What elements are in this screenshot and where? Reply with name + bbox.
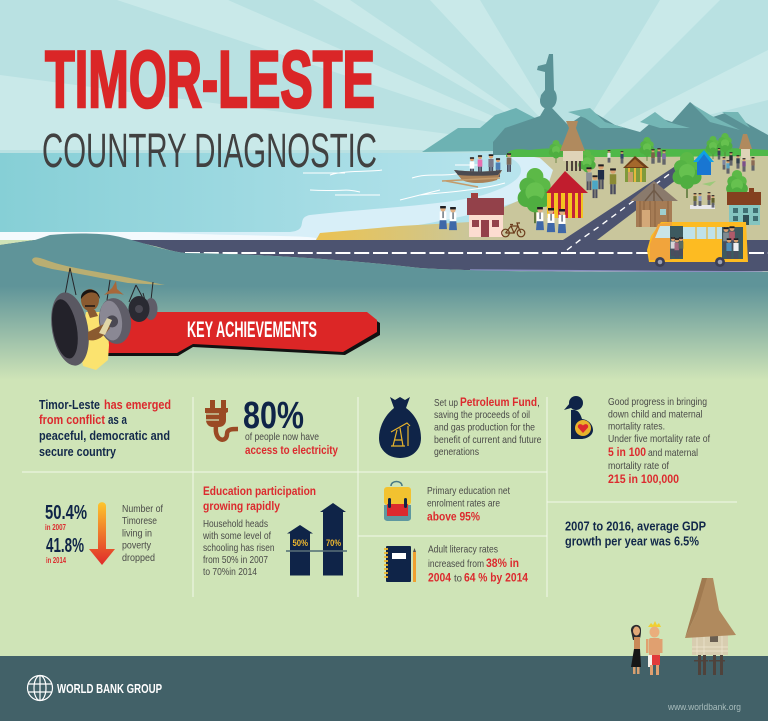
scene: far hut	[739, 134, 752, 160]
text: child and maternal mortality: mortality rates.	[608, 420, 665, 432]
scene: large wooden hut	[630, 181, 678, 227]
stat: 80 percent electricity: 80%	[243, 395, 304, 437]
scene: students	[439, 206, 566, 233]
arrow: poverty dropped	[89, 502, 115, 565]
beach foam	[0, 155, 553, 240]
text: adult literacy: 64 % by 2014	[464, 572, 529, 584]
sea	[0, 153, 560, 235]
hedge row	[506, 148, 768, 157]
text: GDP growth	[565, 520, 706, 548]
logo: World Bank Group: WORLD BANK GROUP	[57, 681, 162, 696]
illustration: gong player	[32, 257, 165, 370]
text: emerged from conflict: Timor-Leste	[39, 398, 100, 412]
scene: blue house	[693, 150, 714, 175]
illustration: man in traditional dress	[646, 621, 662, 675]
icon: pregnant mother with heart	[564, 396, 593, 439]
stat: poverty figures: 41.8%	[46, 535, 84, 557]
text: emerged from conflict: as a	[108, 413, 128, 427]
text: emerged from conflict: has emerged	[104, 398, 171, 412]
sand ground	[316, 153, 768, 240]
text: education participation: Education participation	[203, 486, 316, 498]
icon: notebook and pencil	[384, 546, 416, 582]
icon: school backpack	[384, 482, 411, 521]
text: petroleum fund: generations	[434, 446, 479, 458]
sky with sun rays	[0, 0, 768, 156]
text: GDP growth: 2007 to 2016, average GDP	[565, 520, 706, 534]
text: adult literacy: to	[454, 572, 462, 584]
text: education participation: growing rapidly	[203, 501, 281, 513]
footer band	[0, 656, 768, 721]
stat: 80 percent electricity: of people now have	[245, 431, 319, 443]
text: petroleum fund	[434, 395, 542, 458]
stat: poverty figures: in 2007	[45, 522, 66, 532]
text: primary enrolment: Primary education net	[427, 485, 510, 497]
scene: striped red house	[546, 171, 588, 218]
stat: 80 percent electricity	[243, 395, 339, 457]
chart: education arrows 50 and 70 percent: 70%	[326, 538, 341, 548]
text: primary enrolment: above 95%	[427, 512, 480, 524]
illustration: woman in traditional dress	[631, 625, 641, 674]
text: GDP growth: growth per year was 6.5%	[565, 534, 699, 548]
text: child and maternal mortality	[608, 396, 710, 486]
text: emerged from conflict: peaceful, democratic and	[39, 429, 170, 443]
text: petroleum fund: ,	[537, 397, 540, 409]
text: adult literacy: 38% in	[486, 558, 519, 570]
banner: key achievements	[108, 312, 380, 356]
text: education participation: from 50% in 2007	[203, 554, 268, 566]
title: TIMOR-LESTE	[45, 35, 375, 125]
text: poverty description: living in	[122, 528, 152, 540]
text: poverty description: dropped	[122, 552, 155, 564]
illustration: traditional stilt house	[685, 578, 736, 675]
stat: poverty figures	[45, 502, 87, 565]
scene: small hut	[623, 156, 649, 182]
scene: trees	[518, 133, 748, 223]
text: education participation: Household heads	[203, 518, 268, 530]
text: child and maternal mortality: mortality rate of	[608, 460, 669, 472]
text: emerged from conflict: secure country	[39, 445, 116, 459]
text: child and maternal mortality: down child and maternal	[608, 408, 702, 420]
scene: seated group	[690, 181, 716, 209]
icon: money bag with oil derrick	[379, 397, 421, 458]
hill and lower background	[0, 234, 768, 380]
stat: poverty figures: 50.4%	[45, 502, 87, 524]
text: education participation: schooling has risen	[203, 542, 275, 554]
icon: electric plug	[205, 400, 238, 440]
scene: bicycle	[502, 223, 525, 237]
text: child and maternal mortality: 215 in 100,000	[608, 474, 679, 486]
text: adult literacy: increased from	[428, 558, 484, 570]
text: poverty description: Number of	[122, 503, 163, 515]
chart: education arrows 50 and 70 percent: 50%	[292, 538, 308, 548]
text: child and maternal mortality: and maternal	[648, 447, 698, 459]
text: poverty description: Timorese	[122, 515, 157, 527]
scene: teal house	[727, 188, 761, 225]
text: education participation: with some level of	[202, 530, 271, 542]
text: petroleum fund: and gas production for the	[434, 422, 535, 434]
footer: website: www.worldbank.org	[667, 702, 741, 713]
text: adult literacy	[428, 544, 529, 584]
text: child and maternal mortality: 5 in 100	[608, 447, 646, 459]
scene: villagers	[586, 148, 755, 198]
mountains with statue	[422, 54, 768, 155]
scene: yellow bus	[647, 222, 748, 267]
text: education participation: to 70%in 2014	[203, 566, 257, 578]
text: adult literacy: Adult literacy rates	[428, 544, 498, 556]
scene: tall traditional hut	[560, 121, 585, 171]
text: poverty description	[122, 503, 163, 564]
text: petroleum fund: Set up	[434, 397, 458, 409]
main road	[0, 240, 768, 272]
white surf line	[0, 232, 316, 240]
scene: boat and passengers	[442, 153, 511, 187]
text: petroleum fund: saving the proceeds of oil	[434, 409, 530, 421]
text: education participation	[202, 486, 316, 578]
text: primary enrolment: enrolment rates are	[427, 498, 500, 510]
stat: poverty figures: in 2014	[46, 555, 66, 565]
background: page gradient	[0, 240, 768, 660]
stat: 80 percent electricity: access to electricity	[245, 445, 339, 457]
subtitle: COUNTRY DIAGNOSTIC	[42, 125, 377, 178]
text: petroleum fund: benefit of current and future	[434, 434, 542, 446]
scene: white house	[467, 193, 504, 237]
text: poverty description: poverty	[122, 540, 152, 552]
logo: World Bank Group	[28, 676, 162, 700]
text: petroleum fund: Petroleum Fund	[460, 395, 537, 409]
chart: education arrows 50 and 70 percent	[286, 503, 347, 576]
text: child and maternal mortality: Good progress in bringing	[608, 396, 707, 408]
text: child and maternal mortality: Under five mortality rate of	[608, 433, 710, 445]
text: primary enrolment	[427, 485, 510, 524]
side road	[563, 163, 680, 250]
banner: key achievements: KEY ACHIEVEMENTS	[187, 317, 317, 342]
text: emerged from conflict: from conflict	[39, 413, 106, 427]
text: emerged from conflict	[39, 398, 171, 459]
text: adult literacy: 2004	[428, 572, 452, 584]
